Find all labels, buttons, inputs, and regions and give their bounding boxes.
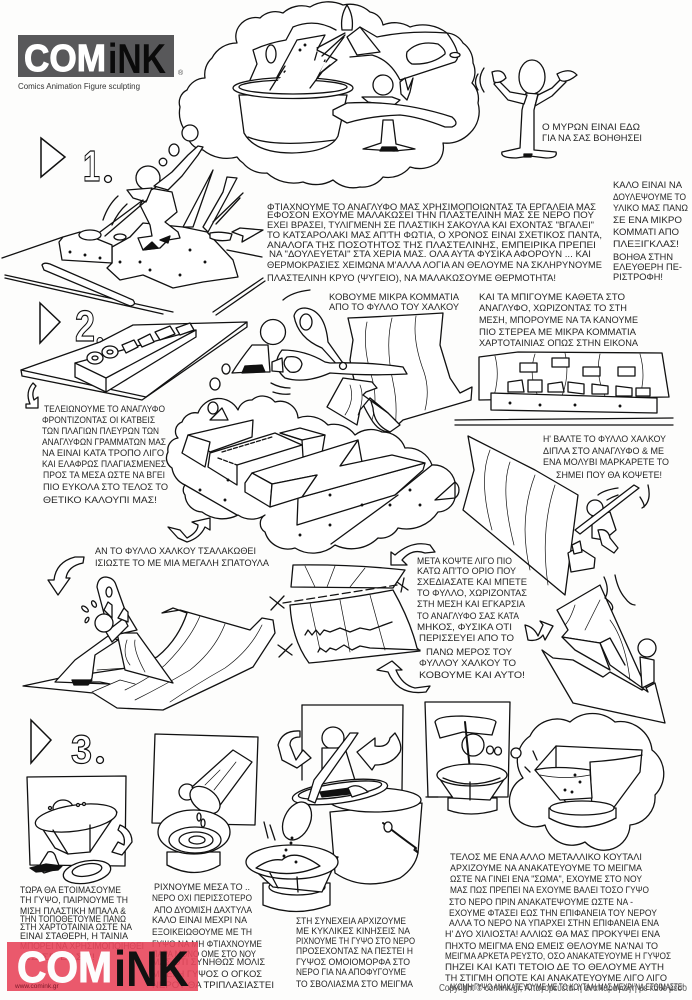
paragraph: preparing the plaster: ΤΗΝ ΤΟΠΟΘΕΤΟΥΜΕ ΠΑΝΩ bbox=[20, 913, 126, 924]
bubbles of the thought bbox=[159, 125, 198, 166]
scene: relief with copper shims bbox=[455, 352, 673, 425]
paragraph: pouring water bbox=[152, 881, 274, 990]
scene: figure sculpting on the mound bbox=[2, 146, 265, 315]
paragraph: stirring the mixture bbox=[445, 851, 684, 992]
paragraph: making the relief: ΘΕΡΜΟΚΡΑΣΙΕΣ ΧΕΙΜΩΝΑ Μ'ΑΛΛΑ ΛΟΓΙΑ ΑΝ ΘΕΛΟΥΜΕ ΝΑ ΣΚΛΗΡΥΝΟΥΜΕ bbox=[267, 259, 602, 270]
paragraph: making the relief: ΦΤΙΑΧΝΟΥΜΕ ΤΟ ΑΝΑΓΛΥΦΟ ΜΑΣ ΧΡΗΣΙΜΟΠΟΙΩΝΤΑΣ ΤΑ ΕΡΓΑΛΕΙΑ ΜΑΣ bbox=[267, 201, 596, 212]
side note: plexiglas: ΒΟΗΘΑ ΣΤΗΝ bbox=[613, 251, 673, 262]
caption: flatten with a spatula: ΑΝ ΤΟ ΦΥΛΛΟ ΧΑΛΚΟΥ ΤΣΑΛΑΚΩΘΕΙ bbox=[95, 545, 256, 556]
caption: cut small pieces: ΚΟΒΟΥΜΕ ΜΙΚΡΑ ΚΟΜΜΑΤΙΑ bbox=[329, 291, 460, 302]
step marker 1: 1 bbox=[83, 142, 100, 191]
paragraph: preparing the plaster: ΜΙΣΗ ΠΛΑΣΤΙΚΗ ΜΠΑΛΑ & bbox=[20, 905, 127, 916]
logo: Comink top: COM bbox=[24, 38, 106, 80]
caption: flatten with a spatula bbox=[95, 545, 270, 568]
side note: plexiglas bbox=[613, 179, 688, 282]
caption: mark with a pencil: ΕΝΑ ΜΟΛΥΒΙ ΜΑΡΚΑΡΕΤΕ ΤΟ bbox=[543, 456, 669, 467]
paragraph: insert the pieces bbox=[479, 291, 639, 348]
arrow: down from the board bbox=[26, 383, 38, 408]
panel: stirring bbox=[425, 702, 510, 814]
paragraph: cut a little lower: ΤΟ ΦΥΛΛΟ, ΧΩΡΙΖΟΝΤΑΣ bbox=[417, 587, 527, 598]
paragraph: insert the pieces: ΧΑΡΤΟΤΑΙΝΙΑΣ ΟΠΩΣ ΣΤΗΝ ΕΙΚΟΝΑ bbox=[479, 337, 639, 348]
paragraph: pouring water: ΚΑΛΟ ΕΙΝΑΙ ΜΕΧΡΙ ΝΑ bbox=[152, 914, 248, 925]
side note: plexiglas: ΕΛΕΥΘΕΡΗ ΠΕ- bbox=[613, 261, 682, 272]
block being carved bbox=[59, 232, 112, 263]
pot body bbox=[239, 95, 347, 153]
flame and tool bbox=[342, 5, 352, 30]
paragraph: preparing the plaster: ΜΠΟΡΕΙ ΝΑ ΧΡΗΣΙΜΟΠΟΙΗΘΕΙ bbox=[20, 940, 144, 951]
arrow: curved down-left bbox=[48, 557, 84, 595]
paragraph: pouring water: ΡΙΧΝΟΥΜΕ ΜΕΣΑ ΤΟ .. bbox=[154, 881, 250, 892]
lower bowl bbox=[263, 883, 330, 912]
paragraph: insert the pieces: ΜΕΣΗ, ΜΠΟΡΟΥΜΕ ΝΑ ΤΑ ΚΑΝΟΥΜΕ bbox=[479, 314, 638, 325]
paragraph: making the relief: ΠΛΑΣΤΕΛΙΝΗ ΚΡΥΟ (ΨΥΓΕΙΟ), ΝΑ ΜΑΛΑΚΩΣΟΥΜΕ ΘΕΡΜΟΤΗΤΑ! bbox=[267, 272, 556, 283]
caption: mark with a pencil bbox=[543, 433, 669, 480]
paragraph: cut a little lower: ΠΕΡΙΣΣΕΥΕΙ ΑΠΟ ΤΟ bbox=[419, 632, 514, 643]
logo: Comink top: iNK bbox=[108, 35, 166, 82]
paragraph: pouring water: ΓΥΨΟ ΝΑ ΜΗ ΦΤΙΑΧΝΟΥΜΕ bbox=[152, 938, 262, 949]
small figure behind the handle bbox=[373, 75, 393, 95]
paragraph: preparing the plaster: ΤΗ ΓΥΨΟ, ΠΑΙΡΝΟΥΜΕ ΤΗ bbox=[20, 894, 128, 905]
paragraph: preparing the plaster: ΤΩΡΑ ΘΑ ΕΤΟΙΜΑΣΟΥΜΕ bbox=[20, 884, 121, 895]
long tool on the table bbox=[42, 263, 134, 306]
logo: Comink top: ® bbox=[178, 69, 184, 77]
panel: bowl on tape bbox=[27, 776, 132, 887]
plasticine slab bbox=[270, 35, 337, 90]
paragraph: cut a little lower: ΜΕΤΑ ΚΟΨΤΕ ΛΙΓΟ ΠΙΟ bbox=[417, 555, 512, 566]
paragraph: making the relief: ΝΑ "ΔΟΥΛΕΥΕΤΑΙ" ΣΤΑ ΧΕΡΙΑ ΜΑΣ. ΟΛΑ ΑΥΤΑ ΦΥΣΙΚΑ ΑΦΟΡΟΥΝ ... ΚΑΙ bbox=[269, 248, 591, 259]
paragraph: stirring the mixture: ΩΣΤΕ ΝΑ ΓΙΝΕΙ ΕΝΑ "ΣΩΜΑ", ΕΧΟΥΜΕ ΣΤΟ ΝΟΥ bbox=[450, 873, 643, 884]
arrow: left of the last sheet bbox=[525, 621, 553, 640]
spoon bbox=[308, 733, 358, 803]
paragraph: finishing the relief: ΑΝΑΓΛΥΦΩΝ ΓΡΑΜΜΑΤΩΝ ΜΑΣ bbox=[42, 436, 166, 447]
scene: cutting the sheet across bbox=[270, 565, 420, 663]
paragraph: finishing the relief: ΦΡΟΝΤΙΖΟΝΤΑΣ ΟΙ ΚΑΤΒΕΙΣ bbox=[42, 414, 155, 425]
paragraph: pouring water: ΜΑΣ ΟΤΙ ΣΥΝΗΘΩΣ ΜΟΛΙΣ bbox=[152, 956, 265, 967]
figure bbox=[138, 188, 180, 250]
paragraph: cut a little lower: ΜΗΚΟΣ, ΦΥΣΙΚΑ ΟΤΙ bbox=[417, 621, 512, 632]
scene: figure cutting the copper sheet bbox=[232, 290, 472, 432]
side note: plexiglas: ΠΛΕΞΙΓΚΛΑΣ! bbox=[613, 238, 679, 249]
logo: Comink red watermark: www.comink.gr bbox=[14, 983, 60, 990]
paragraph: pouring water: ΝΕΡΟ ΟΧΙ ΠΕΡΙΣΣΟΤΕΡΟ bbox=[152, 892, 252, 903]
paragraph: cut a little lower: ΣΤΗ ΜΕΣΗ ΚΑΙ ΕΓΚΑΡΣΙΑ bbox=[417, 598, 526, 609]
paragraph: cut a little lower: ΠΑΝΩ ΜΕΡΟΣ ΤΟΥ bbox=[426, 646, 513, 657]
paragraph: stirring the mixture: ΣΤΟ ΝΕΡΟ ΠΡΙΝ ΑΝΑΚΑΤΕΨΟΥΜΕ ΩΣΤΕ ΝΑ - bbox=[449, 896, 633, 907]
figure: Myron waving bbox=[476, 60, 577, 158]
mound bbox=[107, 223, 238, 288]
paragraph: sprinkling plaster: ΤΟ ΣΒΟΛΙΑΣΜΑ ΣΤΟ ΜΕΙΓΜΑ bbox=[296, 978, 414, 989]
caption: flatten with a spatula: ΙΣΙΩΣΤΕ ΤΟ ΜΕ ΜΙΑ ΜΕΓΑΛΗ ΣΠΑΤΟΥΛΑ bbox=[95, 557, 270, 568]
paragraph: cut a little lower: ΤΟ ΑΝΑΓΛΥΦΟ ΣΑΣ ΚΑΤΑ bbox=[417, 610, 520, 621]
bucket bbox=[330, 803, 422, 884]
paragraph: stirring the mixture: ΠΗΖΕΙ ΚΑΙ ΚΑΤΙ ΤΕΤΟΙΟ ΔΕ ΤΟ ΘΕΛΟΥΜΕ ΑΥΤΗ bbox=[445, 961, 664, 972]
logo: Comink top bbox=[18, 35, 184, 82]
step marker 2 bbox=[40, 302, 103, 351]
paragraph: stirring the mixture: ΕΧΟΥΜΕ ΦΤΑΣΕΙ ΕΩΣ ΤΗΝ ΕΠΙΦΑΝΕΙΑ ΤΟΥ ΝΕΡΟΥ bbox=[449, 907, 658, 918]
scissors bbox=[294, 308, 345, 368]
paragraph: cut a little lower bbox=[417, 555, 527, 680]
paragraph: finishing the relief: ΤΕΛΕΙΩΝΟΥΜΕ ΤΟ ΑΝΑΓΛΥΦΟ bbox=[44, 403, 165, 414]
paragraph: sprinkling plaster: ΡΙΧΝΟΥΜΕ ΤΗ ΓΥΨΟ ΣΤΟ ΝΕΡΟ bbox=[296, 935, 415, 946]
step marker 1 bbox=[41, 138, 112, 191]
paragraph: finishing the relief: ΠΡΟΣ ΤΑ ΜΕΣΑ ΩΣΤΕ ΝΑ ΒΓΕΙ bbox=[43, 469, 165, 480]
paragraph: cut a little lower: ΣΧΕΔΙΑΣΑΤΕ ΚΑΙ ΜΠΕΤΕ bbox=[417, 576, 527, 587]
logo: Comink red watermark bbox=[7, 941, 198, 997]
step marker 3 bbox=[31, 720, 104, 772]
paragraph: insert the pieces: ΑΝΑΓΛΥΦΟ, ΧΩΡΙΖΟΝΤΑΣ ΤΟ ΣΤΗ bbox=[479, 302, 627, 313]
paragraph: making the relief: ΕΧΕΙ ΒΡΑΣΕΙ, ΤΥΛΙΓΜΕΝΗ ΣΕ ΠΛΑΣΤΙΚΗ ΣΑΚΟΥΛΑ ΚΑΙ ΕΧΟΝΤΑΣ "ΒΓΑΛΕΙ" bbox=[267, 219, 594, 230]
paragraph: preparing the plaster: ΕΙΝΑΙ ΣΤΑΘΕΡΗ, Η ΤΑΙΝΙΑ bbox=[20, 930, 129, 941]
paragraph: insert the pieces: ΠΙΟ ΣΤΕΡΕΑ ΜΕ ΜΙΚΡΑ ΚΟΜΜΑΤΙΑ bbox=[479, 326, 637, 337]
paragraph: making the relief: ΕΦΟΣΟΝ ΕΧΟΥΜΕ ΜΑΛΑΚΩΣΕΙ ΤΗΝ ΠΛΑΣΤΕΛΙΝΗ ΜΑΣ ΣΕ ΝΕΡΟ ΠΟΥ bbox=[267, 209, 595, 220]
paragraph: stirring the mixture: ΤΕΛΟΣ ΜΕ ΕΝΑ ΑΛΛΟ ΜΕΤΑΛΛΙΚΟ ΚΟΥΤΑΛΙ bbox=[450, 851, 642, 862]
caption: Myron bbox=[542, 121, 642, 143]
side note: plexiglas: ΥΛΙΚΟ ΜΑΣ ΠΑΝΩ bbox=[613, 202, 688, 213]
paragraph: finishing the relief bbox=[42, 403, 168, 505]
panel: sprinkling plaster from bucket bbox=[246, 705, 422, 912]
paragraph: making the relief bbox=[267, 201, 602, 283]
arrow: bottom of the cut sheet bbox=[377, 661, 430, 693]
paragraph: sprinkling plaster: ΓΥΨΟΣ ΟΜΟΙΟΜΟΡΦΑ ΣΤΟ bbox=[296, 956, 410, 967]
lid ring bbox=[291, 774, 389, 810]
paragraph: sprinkling plaster bbox=[296, 915, 415, 989]
paragraph: preparing the plaster bbox=[20, 884, 144, 962]
caption: cut small pieces bbox=[329, 291, 460, 312]
paragraph: stirring the mixture: Η' ΔΥΟ ΧΙΛΙΟΣΤΑ! ΑΛΛΙΩΣ ΘΑ ΜΑΣ ΠΡΟΚΥΨΕΙ ΕΝΑ bbox=[445, 928, 661, 939]
paragraph: finishing the relief: ΘΕΤΙΚΟ ΚΑΛΟΥΠΙ ΜΑΣ! bbox=[43, 494, 157, 505]
paragraph: sprinkling plaster: ΝΕΡΟ ΓΙΑ ΝΑ ΑΠΟΦΥΓΟΥΜΕ bbox=[296, 966, 406, 977]
paragraph: making the relief: ΑΝΑΛΟΓΑ ΤΗΣ ΠΟΣΟΤΗΤΟΣ ΤΗΣ ΠΛΑΣΤΕΛΙΝΗΣ, ΕΜΠΕΙΡΙΚΑ ΠΡΕΠΕΙ bbox=[267, 239, 596, 250]
figure bbox=[232, 345, 270, 373]
paragraph: cut a little lower: ΚΑΤΩ ΑΠ'ΤΟ ΟΡΙΟ ΠΟΥ bbox=[417, 565, 517, 576]
paragraph: preparing the plaster: ΩΣ ΣΕ ΒΑΣΗ! bbox=[22, 951, 95, 962]
bubble: cutaway of the bowl bbox=[510, 713, 664, 850]
side note: plexiglas: ΡΙΣΤΡΟΦΗ! bbox=[613, 271, 663, 282]
paragraph: making the relief: ΤΟ ΚΑΤΣΑΡΟΛΑΚΙ ΜΑΣ ΑΠ'ΤΗ ΦΩΤΙΑ, Ο ΧΡΟΝΟΣ ΕΙΝΑΙ ΣΧΕΤΙΚΟΣ ΠΑΝΤΑ, bbox=[267, 229, 602, 240]
paragraph: cut a little lower: ΦΥΛΛΟΥ ΧΑΛΚΟΥ ΤΟ bbox=[419, 657, 516, 668]
caption: mark with a pencil: ΔΙΠΛΑ ΣΤΟ ΑΝΑΓΛΥΦΟ & ΜΕ bbox=[543, 445, 664, 456]
side note: plexiglas: ΚΟΜΜΑΤΙ ΑΠΟ bbox=[613, 226, 679, 237]
paragraph: pouring water: ΑΠΟ ΔΥΟΜΙΣΗ ΔΑΧΤΥΛΑ bbox=[154, 904, 253, 915]
paragraph: preparing the plaster: ΣΤΗ ΧΑΡΤΟΤΑΙΝΙΑ ΩΣΤΕ ΝΑ bbox=[20, 921, 133, 932]
paragraph: stirring the mixture: ΑΡΧΙΖΟΥΜΕ ΝΑ ΑΝΑΚΑΤΕΥΟΥΜΕ ΤΟ ΜΕΙΓΜΑ bbox=[450, 862, 643, 873]
caption: mark with a pencil: ΣΗΜΕΙ ΠΟΥ ΘΑ ΚΟΨΕΤΕ! bbox=[556, 469, 662, 480]
caption: Myron: ΓΙΑ ΝΑ ΣΑΣ ΒΟΗΘΗΣΕΙ bbox=[542, 132, 642, 143]
paragraph: stirring the mixture: ΠΗΧΤΟ ΜΕΙΓΜΑ ΕΝΩ ΕΜΕΙΣ ΘΕΛΟΥΜΕ ΝΑ'ΝΑΙ ΤΟ bbox=[445, 940, 658, 951]
scene: relief on the board bbox=[21, 322, 247, 400]
tagline: Comics Animation Figure sculpting bbox=[18, 81, 140, 91]
paragraph: finishing the relief: ΠΙΟ ΕΥΚΟΛΑ ΣΤΟ ΤΕΛΟΣ ΤΟ bbox=[43, 481, 168, 492]
side note: plexiglas: ΣΕ ΕΝΑ ΜΙΚΡΟ bbox=[613, 214, 682, 225]
logo: Comink red watermark: COM bbox=[17, 943, 112, 992]
panel: pouring water bbox=[152, 734, 258, 872]
bubbles of the central cloud bbox=[210, 364, 230, 390]
paragraph: finishing the relief: ΤΩΝ ΠΛΑΓΙΩΝ ΠΛΕΥΡΩΝ ΤΩΝ bbox=[42, 425, 159, 436]
caption: Myron: Ο ΜΥΡΩΝ ΕΙΝΑΙ ΕΔΩ bbox=[542, 121, 640, 132]
step marker 2: 2 bbox=[75, 302, 95, 351]
tools stuck in the mound bbox=[183, 170, 213, 227]
step marker 3: 3 bbox=[71, 728, 92, 772]
thought bubble: pot on the stove bbox=[179, 2, 479, 188]
paragraph: finishing the relief: ΝΑ ΕΙΝΑΙ ΚΑΤΑ ΤΡΟΠΟ ΛΙΓΟ bbox=[42, 447, 164, 458]
paragraph: sprinkling plaster: ΠΡΟΣΕΧΟΝΤΑΣ ΝΑ ΠΕΣΤΕΙ Η bbox=[296, 945, 413, 956]
side note: plexiglas: ΚΑΛΟ ΕΙΝΑΙ ΝΑ bbox=[613, 179, 683, 190]
paragraph: pouring water: ΕΞΟΙΚΕΙΩΘΟΥΜΕ ΜΕ ΤΗ bbox=[152, 926, 252, 937]
arrow: below the cloud bbox=[168, 518, 210, 542]
paragraph: stirring the mixture: ΜΑΣ ΠΩΣ ΠΡΕΠΕΙ ΝΑ ΕΧΟΥΜΕ ΒΑΛΕΙ ΤΟΣΟ ΓΥΨΟ bbox=[450, 884, 649, 895]
rotation arrows bbox=[278, 731, 311, 768]
paragraph: pouring water: ΜΠΕΙ Η ΓΥΨΟΣ Ο ΟΓΚΟΣ bbox=[152, 968, 262, 979]
paragraph: stirring the mixture: ΑΛΛΑ ΤΟ ΝΕΡΟ ΝΑ ΥΠΑΡΧΕΙ ΣΤΗΝ ΕΠΙΦΑΝΕΙΑ ΕΝΑ bbox=[449, 917, 660, 928]
central cloud with 3D letter relief bbox=[166, 396, 459, 553]
small figure on the cloud bbox=[208, 402, 218, 414]
paragraph: cut a little lower: ΚΟΒΟΥΜΕ ΚΑΙ ΑΥΤΟ! bbox=[419, 669, 525, 680]
logo: Comink red watermark: iNK bbox=[114, 941, 189, 997]
scene: figure cutting the top of the sheet bbox=[542, 575, 665, 723]
scene: sheet and figure with pencil bbox=[463, 436, 649, 595]
paragraph: finishing the relief: ΚΑΙ ΕΛΑΦΡΩΣ ΠΛΑΓΙΑΣΜΕΝΕΣ bbox=[42, 458, 166, 469]
arrow: top of the cut sheet bbox=[391, 544, 435, 565]
caption: mark with a pencil: Η' ΒΑΛΤΕ ΤΟ ΦΥΛΛΟ ΧΑΛΚΟΥ bbox=[543, 433, 667, 444]
caption: cut small pieces: ΑΠΟ ΤΟ ΦΥΛΛΟ ΤΟΥ ΧΑΛΚΟΥ bbox=[329, 301, 460, 312]
paragraph: sprinkling plaster: ΜΕ ΚΥΚΛΙΚΕΣ ΚΙΝΗΣΕΙΣ ΝΑ bbox=[296, 925, 411, 936]
paragraph: pouring water: ΝΕΡΟΥ ΘΑ ΤΡΙΠΛΑΣΙΑΣΤΕΙ bbox=[152, 979, 274, 990]
scene: figure with spatula flattening the sheet bbox=[23, 577, 275, 710]
paragraph: sprinkling plaster: ΣΤΗ ΣΥΝΕΧΕΙΑ ΑΡΧΙΖΟΥΜΕ bbox=[296, 915, 406, 926]
pot handle bbox=[333, 103, 456, 127]
paragraph: insert the pieces: ΚΑΙ ΤΑ ΜΠΙΓΟΥΜΕ ΚΑΘΕΤΑ ΣΤΟ bbox=[479, 291, 625, 302]
paragraph: pouring water: ΠΑΡΑ ΜΟΝΟ ΟΜΕ ΣΤΟ ΝΟΥ bbox=[152, 948, 257, 959]
paragraph: stirring the mixture: ΤΗ ΣΤΙΓΜΗ ΟΠΟΤΕ ΚΑΙ ΑΝΑΚΑΤΕΥΟΥΜΕ ΛΙΓΟ ΛΙΓΟ bbox=[445, 972, 667, 983]
